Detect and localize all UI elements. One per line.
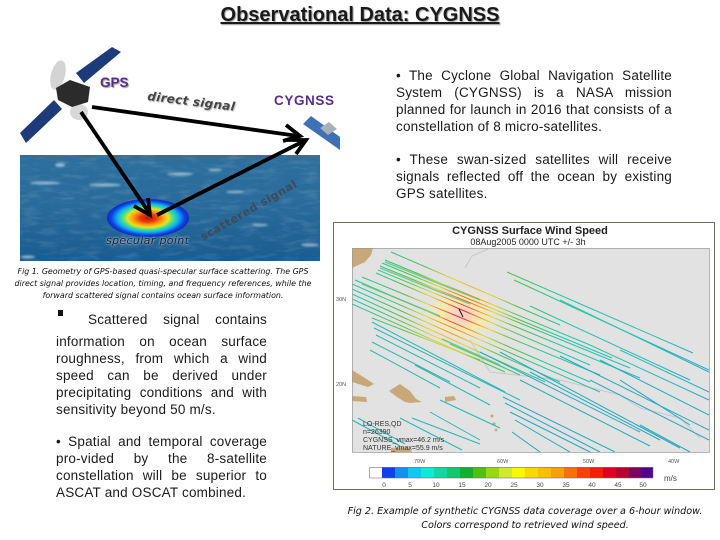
label: scattered signal: scattered signal (198, 177, 300, 244)
text: scattered signal information: Scattered signal contains (88, 312, 267, 327)
ocean photo (20, 155, 320, 261)
text: swan-sized satellites: GPS satellites. (396, 186, 488, 201)
text: CYGNSS mission description: constellation of 8 micro-satellites. (396, 119, 602, 134)
boundary curves (465, 249, 700, 438)
colorbar labels: 0 (382, 482, 386, 489)
caption: figure 2: Colors correspond to retrieved wind speed. (421, 520, 629, 531)
map axis labels: 50W (583, 459, 595, 465)
colorbar labels: 45 (614, 482, 622, 489)
geometry diagram (20, 47, 340, 261)
swath group: upper (352, 252, 709, 400)
text: scattered signal information: speed can be derived under (56, 368, 267, 383)
text: scattered signal information: roughness, from which a wind (56, 351, 267, 366)
text: CYGNSS mission description: System (CYGNSS) is a NASA mission (396, 85, 672, 100)
colorbar unit: m/s (664, 474, 677, 483)
label: CYGNSS: CYGNSS (274, 93, 335, 108)
text: swan-sized satellites: signals reflected off the ocean by existing (396, 169, 672, 184)
arrow: scattered signal (157, 140, 306, 215)
arrow: direct signal (92, 107, 300, 141)
colorbar (369, 467, 653, 478)
text: scattered signal information: sensitivity beyond 50 m/s. (56, 402, 216, 417)
wind speed map (333, 222, 715, 490)
text: swan-sized satellites (396, 152, 672, 201)
text: CYGNSS mission description: planned for launch in 2016 that consists of a (396, 102, 672, 117)
map frame (334, 222, 714, 490)
colorbar labels: 10 (432, 482, 440, 489)
colorbar labels: 5 (408, 482, 412, 489)
map annotations (363, 421, 445, 452)
map axis labels (336, 297, 680, 465)
colorbar labels: 20 (484, 482, 492, 489)
label: GPS: GPS (100, 75, 129, 90)
colorbar labels: 35 (562, 482, 570, 489)
caption: figure 1: forward scattered signal contains ocean surface information. (43, 291, 283, 300)
caption: figure 1 (14, 267, 312, 300)
colorbar labels: 40 (588, 482, 596, 489)
text: scattered signal information: information on ocean surface (56, 334, 267, 349)
text: spatial and temporal coverage: constellation will be superior to (56, 468, 267, 483)
colorbar labels: 25 (510, 482, 518, 489)
text: scattered signal information: precipitating conditions and with (56, 385, 267, 400)
colorbar labels: 50 (639, 482, 647, 489)
map annotations: CYGNSS_vmax=46.2 m/s (363, 437, 445, 444)
text: CYGNSS mission description (396, 68, 672, 134)
caption: figure 2 (348, 506, 702, 531)
map plot area (352, 248, 709, 452)
map axis labels: 30N (336, 297, 346, 303)
arrow: incident signal (81, 112, 150, 215)
swath group: lower (352, 322, 520, 450)
colorbar labels: 30 (536, 482, 544, 489)
map annotations: n=26390 (363, 429, 391, 436)
land masses (352, 248, 497, 452)
map subtitle: 08Aug2005 0000 UTC +/- 3h (470, 237, 586, 247)
caption: figure 1: Fig 1. Geometry of GPS-based quasi-specular surface scattering. The GPS (18, 267, 308, 276)
icon: CYGNSS satellite (303, 116, 340, 150)
text: spatial and temporal coverage: ASCAT and OSCAT combined. (56, 485, 246, 500)
map axis labels: 40W (668, 459, 680, 465)
colorbar labels: 15 (458, 482, 466, 489)
title: Observational Data: CYGNSS (221, 4, 499, 26)
map axis labels: 20N (336, 382, 346, 388)
icon: GPS satellite (20, 47, 121, 143)
icon: specular point footprint (107, 199, 189, 237)
bullet (58, 310, 63, 316)
swath group: thick green (362, 262, 505, 368)
text: spatial and temporal coverage: pro-vided by the 8-satellite (56, 451, 267, 466)
caption: figure 1: direct signal provides location, timing, and frequency references, while the (15, 279, 311, 288)
colorbar labels (382, 482, 647, 489)
label: direct signal: direct signal (147, 89, 237, 114)
text: spatial and temporal coverage: • Spatial and temporal coverage (56, 434, 267, 449)
map annotations: NATURE_vmax=55.9 m/s (363, 445, 443, 452)
storm track (459, 309, 463, 317)
map annotations: LO-RES,QD (363, 421, 402, 428)
map title: CYGNSS Surface Wind Speed (452, 225, 608, 237)
map axis labels: 60W (497, 459, 509, 465)
text: swan-sized satellites: • These swan-sized satellites will receive (396, 152, 672, 167)
caption: figure 2: Fig 2. Example of synthetic CYGNSS data coverage over a 6-hour window. (348, 506, 702, 517)
label: specular point: specular point (106, 234, 190, 247)
swath group: lower right (480, 352, 709, 452)
text: CYGNSS mission description: • The Cyclone Global Navigation Satellite (396, 68, 672, 83)
text: scattered signal information (56, 310, 267, 417)
text: spatial and temporal coverage (56, 434, 267, 500)
map axis labels: 70W (414, 459, 426, 465)
